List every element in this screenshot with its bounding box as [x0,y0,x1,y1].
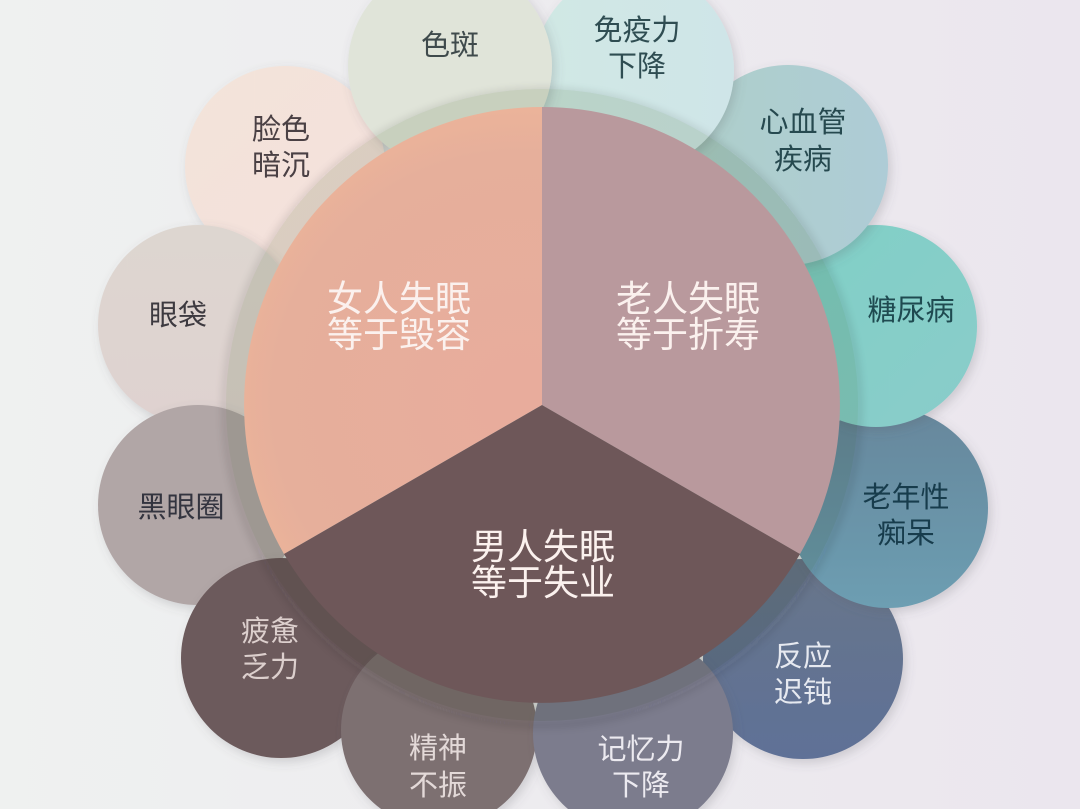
translucent ring around pie [226,89,858,721]
petal: dementia [788,408,988,608]
text: cardiovascular disease: 疾病 [774,143,832,176]
text: slow reaction: 迟钝 [774,676,832,709]
petal: lowered immunity [544,0,740,152]
label: women insomnia: 等于毁容 [327,314,471,355]
pie sector: women [244,107,542,554]
text: eye bags: 眼袋 [149,299,207,332]
text: lowered immunity: 下降 [608,50,666,83]
text: cardiovascular disease: 心血管 [759,106,847,139]
text: lowered immunity: 免疫力 [593,14,681,47]
pie chart [244,107,840,703]
label: elderly insomnia: 老人失眠 [616,278,760,319]
text: dark circles: 黑眼圈 [137,492,225,524]
petal: fatigue [181,558,381,758]
petal: dark spots [348,0,552,168]
petal: dull complexion [185,66,385,266]
petal: slow reaction [703,559,903,759]
text: dementia: 痴呆 [877,517,935,550]
shadow beneath ring [225,91,859,725]
text: low spirits: 不振 [409,769,467,802]
petal: memory decline [533,658,739,809]
label: women insomnia: 女人失眠 [327,278,471,319]
text: dull complexion: 脸色 [252,113,310,146]
text: memory decline: 下降 [612,769,670,802]
label: men insomnia: 男人失眠 [471,526,615,567]
petal: cardiovascular disease [688,65,888,265]
petal: eye bags [98,225,280,418]
pie sector: men [284,405,800,703]
text: low spirits: 精神 [409,732,467,765]
text: memory decline: 记忆力 [597,733,685,766]
text: fatigue: 乏力 [241,651,299,684]
petal: low spirits [341,654,538,809]
petal: diabetes [804,225,984,430]
text: fatigue: 疲惫 [241,615,299,648]
petal: dark circles [98,405,298,605]
text: dull complexion: 暗沉 [252,149,310,182]
label: elderly insomnia: 等于折寿 [616,314,760,355]
text: slow reaction: 反应 [774,640,832,673]
text: dark spots: 色斑 [421,29,479,62]
text: diabetes: 糖尿病 [867,294,955,327]
label: men insomnia: 等于失业 [471,562,615,603]
pie sector: elderly [542,107,840,554]
text: dementia: 老年性 [862,481,950,514]
